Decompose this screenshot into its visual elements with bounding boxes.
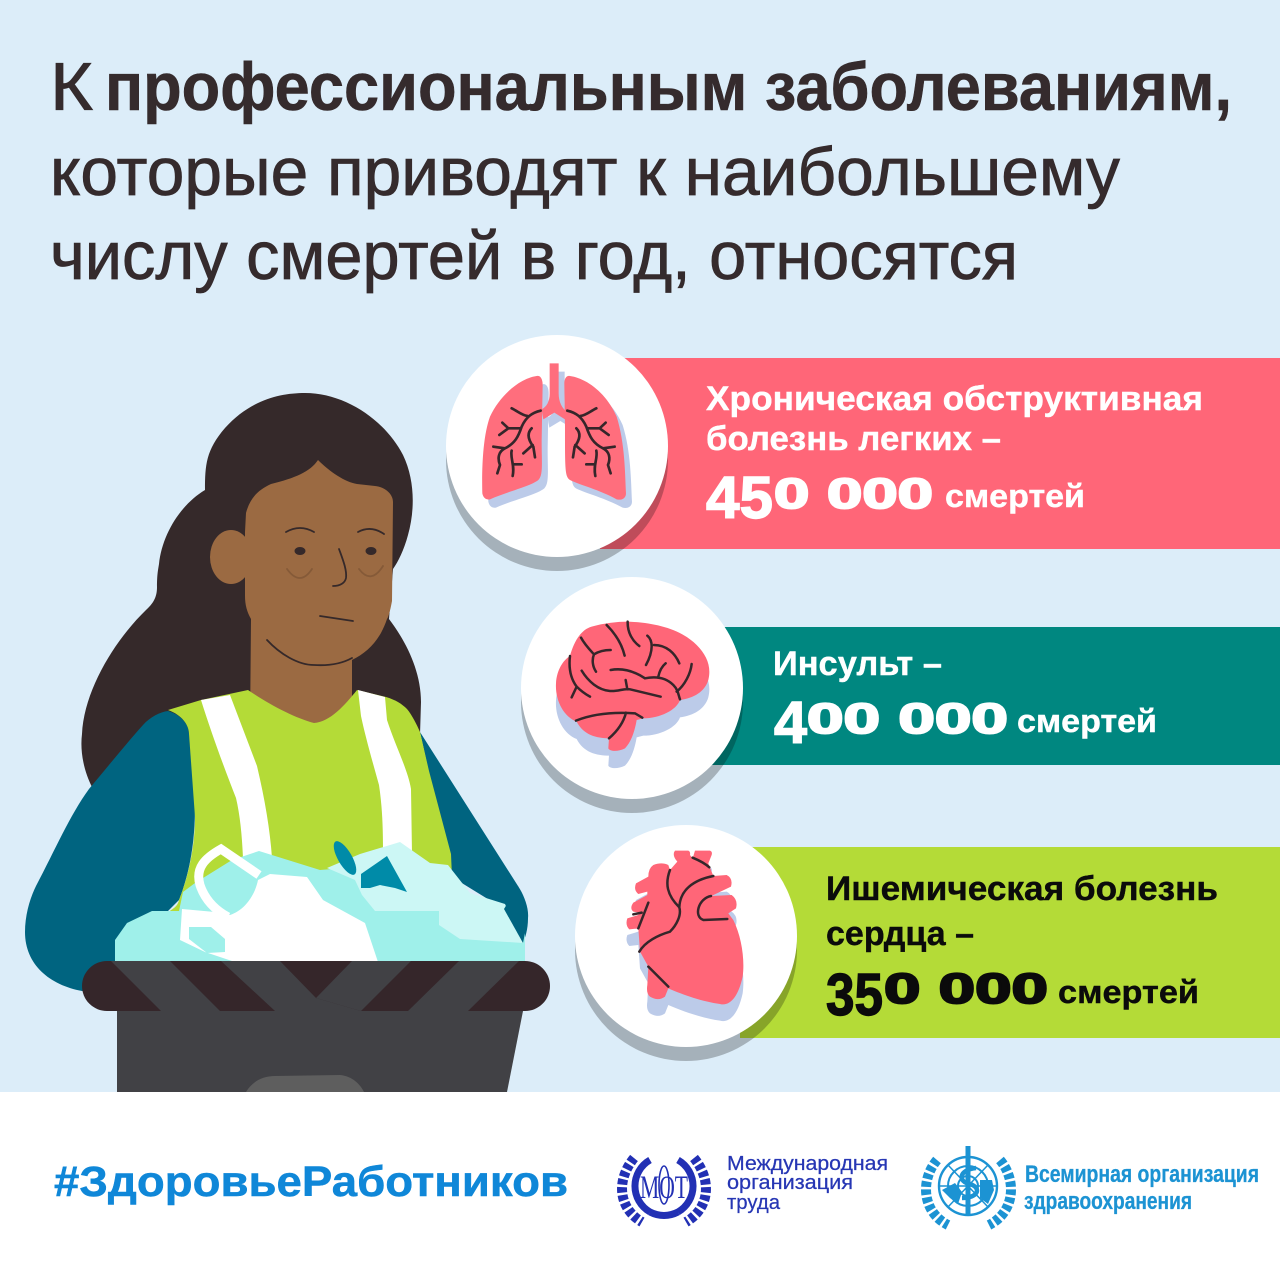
illustration: sanitation worker with waste bin [25, 393, 550, 1092]
waste: plastic bags [115, 838, 528, 962]
text: stroke: 4 [774, 690, 807, 756]
ear [210, 530, 252, 584]
panel: heart disease bar [740, 847, 1280, 1038]
logo: ILO [622, 1158, 706, 1222]
panel: COPD bar [600, 358, 1280, 549]
footer band [0, 1092, 1280, 1280]
text: COPD [706, 380, 1203, 531]
text: stroke: 00 000 [807, 695, 1008, 743]
text: ILO name: Международная [727, 1153, 888, 1175]
text: COPD: смертей [945, 478, 1085, 514]
text: heart disease: 35 [826, 962, 883, 1028]
text: heart disease: 0 000 [884, 965, 1048, 1013]
logo: ILO: МОТ [640, 1170, 688, 1206]
text: heart disease: смертей [1058, 974, 1199, 1010]
text: ILO name: труда [727, 1192, 781, 1214]
title: числу смертей в год, относятся [50, 218, 1018, 294]
text: COPD: Хроническая обструктивная [706, 380, 1203, 418]
text: stroke: смертей [1017, 703, 1157, 739]
text: heart disease: Ишемическая болезнь [826, 870, 1218, 908]
waste bin [82, 961, 550, 1092]
vest stripes [201, 690, 412, 858]
text: COPD: болезнь легких – [706, 420, 1001, 458]
face details [267, 528, 384, 665]
vest [168, 690, 452, 925]
face and neck [245, 460, 393, 730]
text: stroke: Инсульт – [773, 645, 942, 683]
text: ILO name: организация [727, 1172, 853, 1194]
text: COPD: 0 000 [774, 470, 933, 518]
hair [81, 393, 421, 789]
logo: WHO [926, 1146, 1011, 1225]
panel: stroke bar [700, 627, 1280, 765]
text: heart disease [826, 870, 1218, 1028]
text: WHO name: здравоохранения [1024, 1188, 1192, 1215]
title [50, 49, 1232, 294]
text: heart disease: сердца – [826, 915, 974, 953]
text: WHO name [1024, 1161, 1259, 1215]
icon: brain badge [521, 577, 743, 813]
text: ILO name [727, 1153, 888, 1214]
hashtag: #ЗдоровьеРаботников [54, 1158, 568, 1206]
text: stroke [773, 645, 1157, 756]
icon: lungs badge [446, 335, 668, 571]
icon: heart badge [575, 825, 797, 1061]
left sleeve [25, 711, 195, 991]
text: COPD: 45 [706, 465, 773, 531]
title: которые приводят к наибольшему [50, 134, 1120, 210]
title: К [50, 49, 93, 125]
right sleeve [420, 732, 528, 943]
eyes [294, 547, 306, 555]
